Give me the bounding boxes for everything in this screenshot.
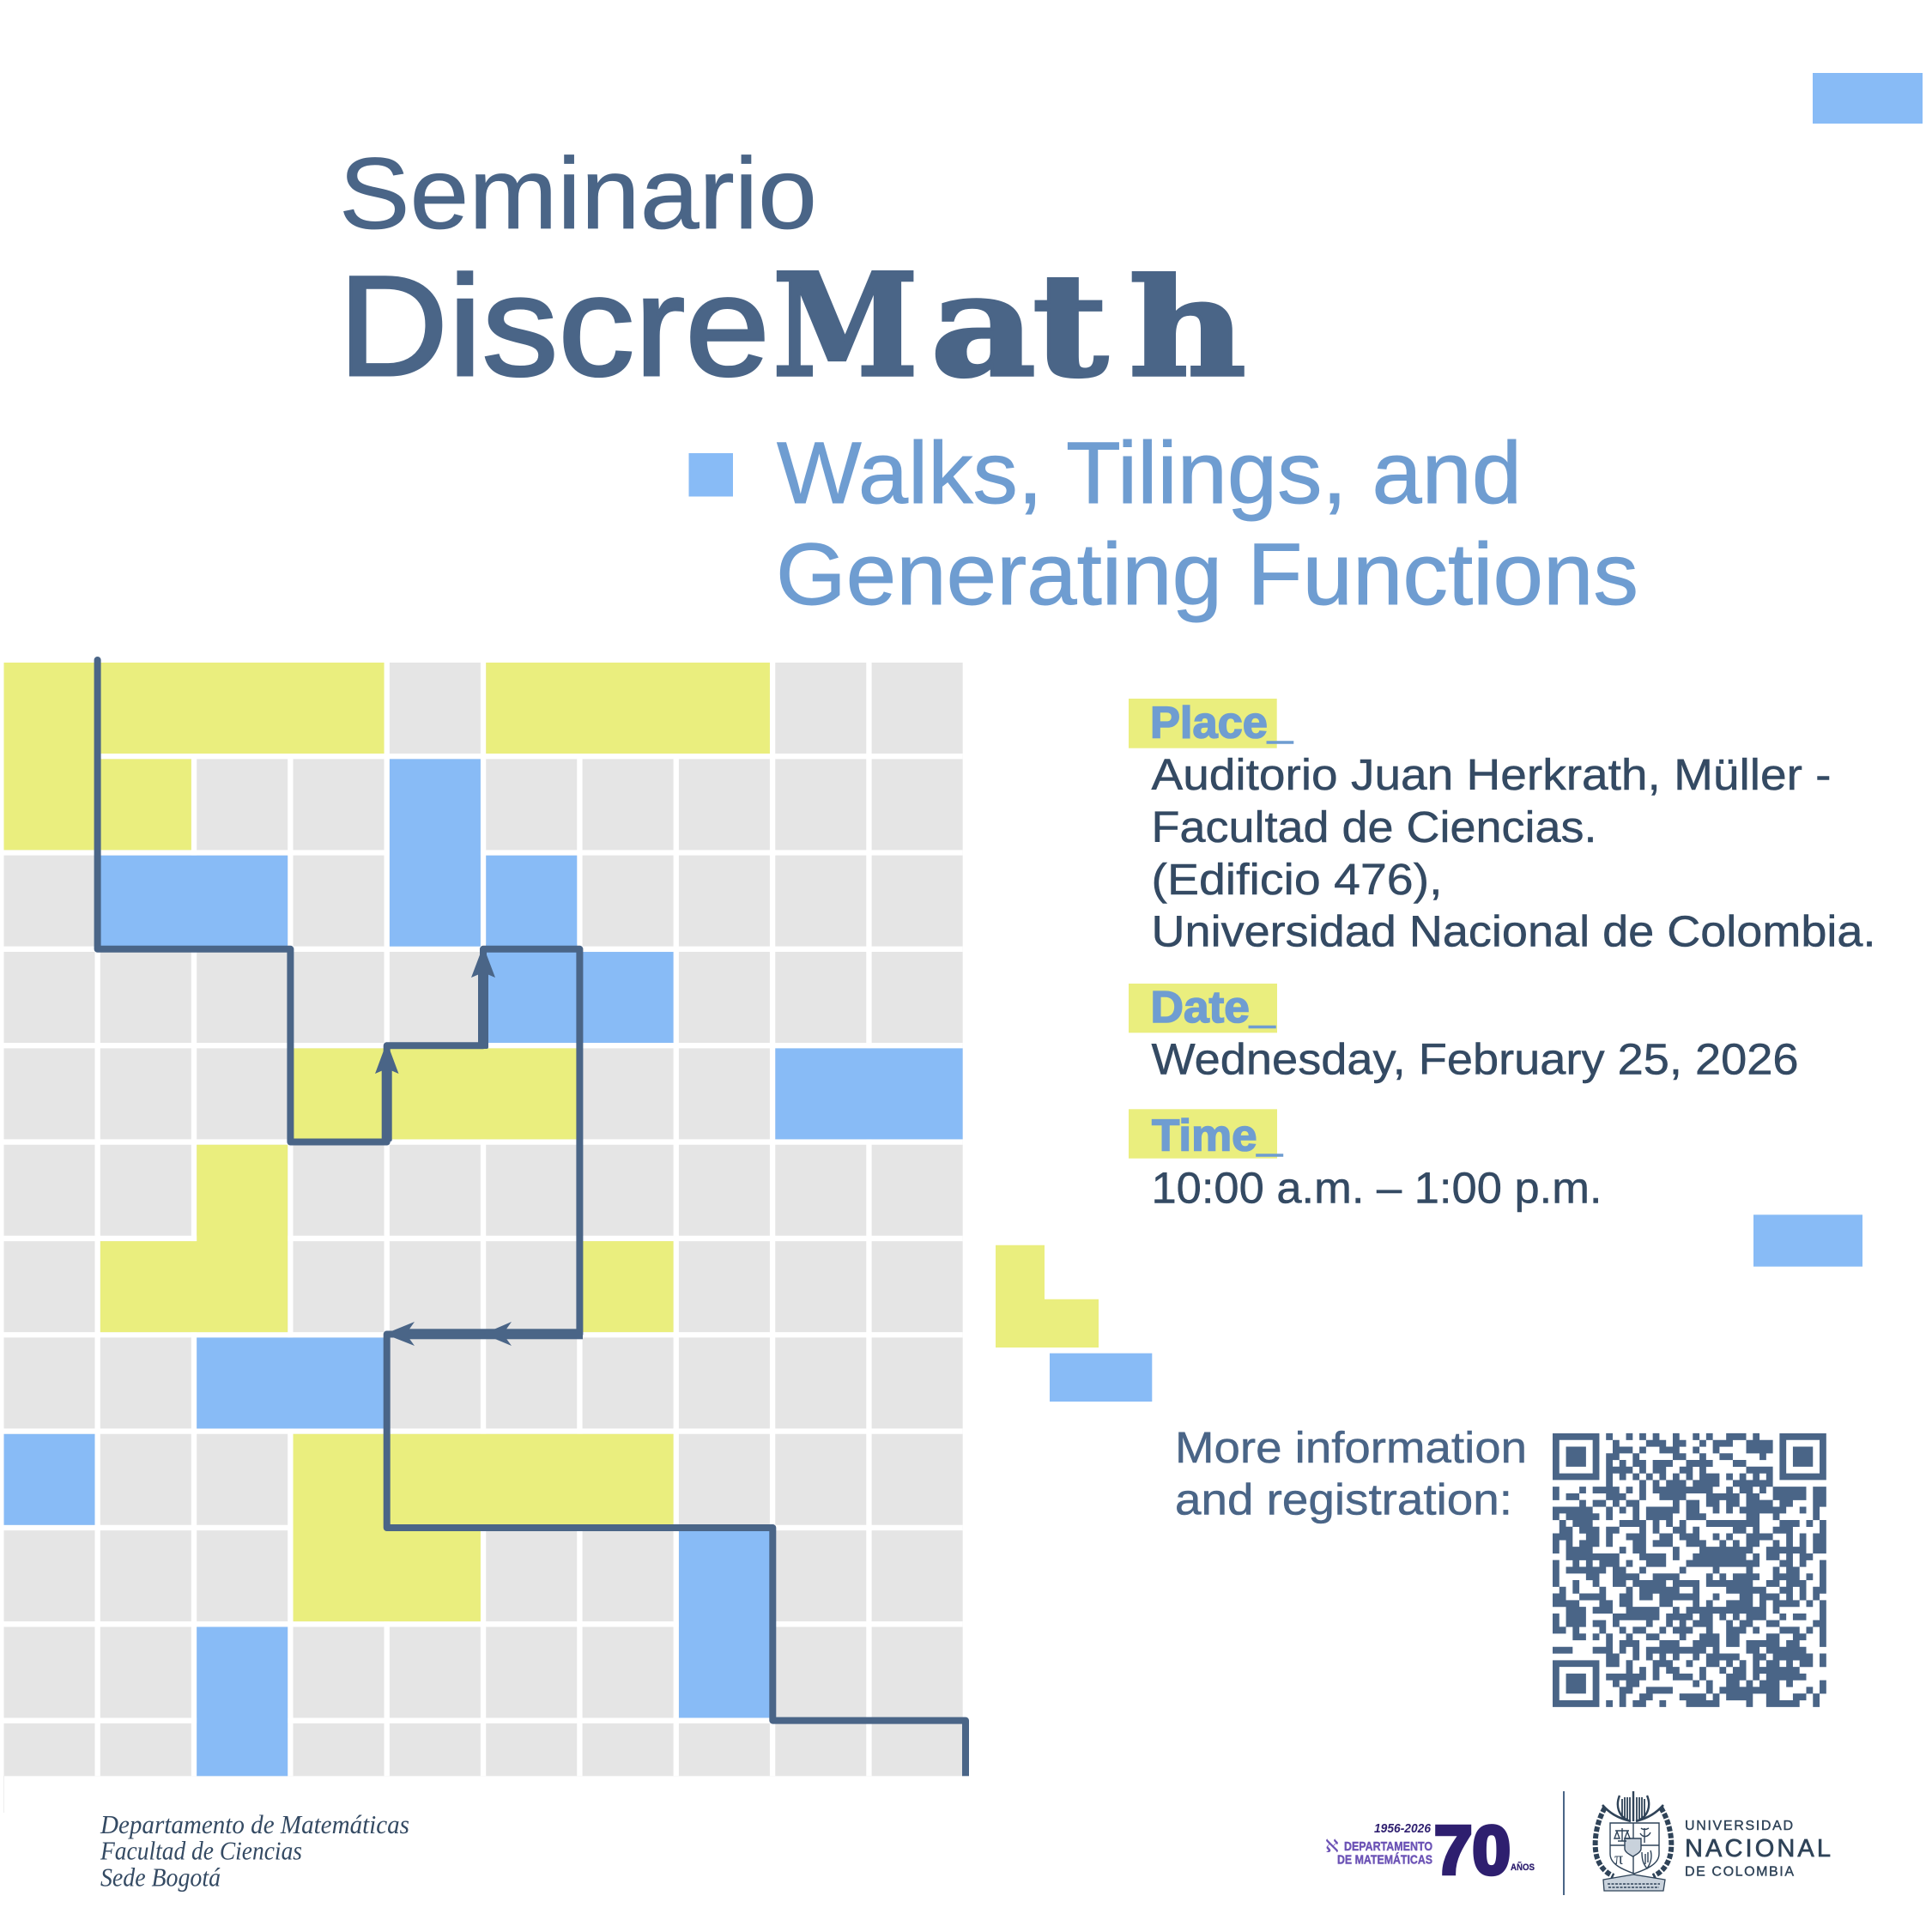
- crest pi: π: [1614, 1850, 1623, 1868]
- title: Seminario: Seminario: [339, 137, 817, 251]
- info: Place text: Facultad de Ciencias.: [1152, 802, 1596, 851]
- footer: department text: Sede Bogotá: [100, 1862, 221, 1893]
- info: Time label: Time_: [1152, 1111, 1283, 1161]
- title: DiscreMath: [338, 242, 1246, 409]
- info: Place text: (Edificio 476),: [1152, 855, 1442, 904]
- crest eagle: [1618, 1791, 1649, 1821]
- text: more information and registration: and registration:: [1175, 1475, 1512, 1524]
- crest ribbon: [1603, 1874, 1665, 1891]
- info: Time text: 10:00 a.m. – 1:00 p.m.: [1152, 1164, 1602, 1213]
- subtitle: Walks, Tilings, and Generating Functions: [776, 424, 1638, 623]
- logo: Departamento de Matemáticas 70 años: [1325, 1812, 1535, 1888]
- title: DiscreMath: a: [930, 242, 1036, 409]
- info: Place label: Place_: [1150, 698, 1293, 748]
- info: Date label: Date_: [1150, 983, 1276, 1033]
- title: DiscreMath: M: [772, 242, 918, 409]
- crest wreaths: [1596, 1808, 1671, 1876]
- title: DiscreMath: h: [1129, 250, 1246, 408]
- text: more information and registration: [1175, 1423, 1527, 1524]
- footer: department text: Facultad de Ciencias: [100, 1836, 302, 1866]
- logo: university crest: [1596, 1791, 1671, 1891]
- QR code: [1553, 1437, 1826, 1704]
- crest shield: [1610, 1823, 1659, 1874]
- decorative tile: blue domino: [1050, 1354, 1152, 1402]
- crest scales, staff, harp: [1614, 1828, 1630, 1841]
- yellow tiles: [3, 663, 770, 1621]
- logo: Departamento de Matemáticas 70 años: DE MATEMÁTICAS: [1337, 1853, 1432, 1868]
- grid background: [3, 663, 963, 1776]
- panel: tiling grid with lattice walk: [3, 660, 966, 1776]
- subtitle: Walks, Tilings, and Generating Functions: Generating Functions: [776, 525, 1638, 623]
- footer: department text: [100, 1809, 409, 1893]
- logo: Universidad Nacional de Colombia: UNIVERSIDAD: [1685, 1819, 1793, 1833]
- arrow: up at column 5: [471, 946, 495, 1049]
- decorative tile: yellow L: [996, 1245, 1099, 1348]
- lattice walk path: [98, 660, 966, 1772]
- title: DiscreMath: t: [1033, 242, 1108, 409]
- blue tiles: [3, 759, 963, 1776]
- title: DiscreMath: Discre: [338, 247, 770, 406]
- footer: department text: Departamento de Matemáticas: [100, 1809, 409, 1839]
- arrows: left along row 7: [385, 1322, 583, 1346]
- logo: Universidad Nacional de Colombia: NACIONAL: [1685, 1835, 1831, 1862]
- decorative tile: right blue: [1753, 1214, 1862, 1267]
- logo: Departamento de Matemáticas 70 años: AÑOS: [1511, 1862, 1535, 1873]
- faint edge line below grid: [3, 1776, 4, 1813]
- logo: Departamento de Matemáticas 70 años: 70: [1434, 1812, 1511, 1888]
- logo: Departamento de Matemáticas 70 años: DEPARTAMENTO: [1344, 1839, 1432, 1854]
- arrow: up at column 4: [375, 1042, 398, 1142]
- info: Date text: Wednesday, February 25, 2026: [1152, 1035, 1799, 1084]
- info: Place text: Auditorio Juan Herkrath, Müller -: [1152, 750, 1832, 799]
- logo: Universidad Nacional de Colombia: [1685, 1819, 1831, 1880]
- logo: Universidad Nacional de Colombia: DE COLOMBIA: [1685, 1865, 1794, 1880]
- logo: Departamento de Matemáticas 70 años: 1956-2026: [1374, 1821, 1432, 1836]
- subtitle: Walks, Tilings, and Generating Functions: Walks, Tilings, and: [777, 424, 1522, 522]
- logo: Departamento de Matemáticas 70 años: ℵ: [1325, 1836, 1339, 1856]
- logo divider: [1563, 1791, 1565, 1895]
- text: more information and registration: More information: [1175, 1423, 1527, 1472]
- decorative tile: top right: [1813, 73, 1923, 124]
- subtitle bullet square: [688, 453, 733, 496]
- info: Place text: [1152, 750, 1876, 956]
- info: Place text: Universidad Nacional de Colombia.: [1152, 906, 1876, 956]
